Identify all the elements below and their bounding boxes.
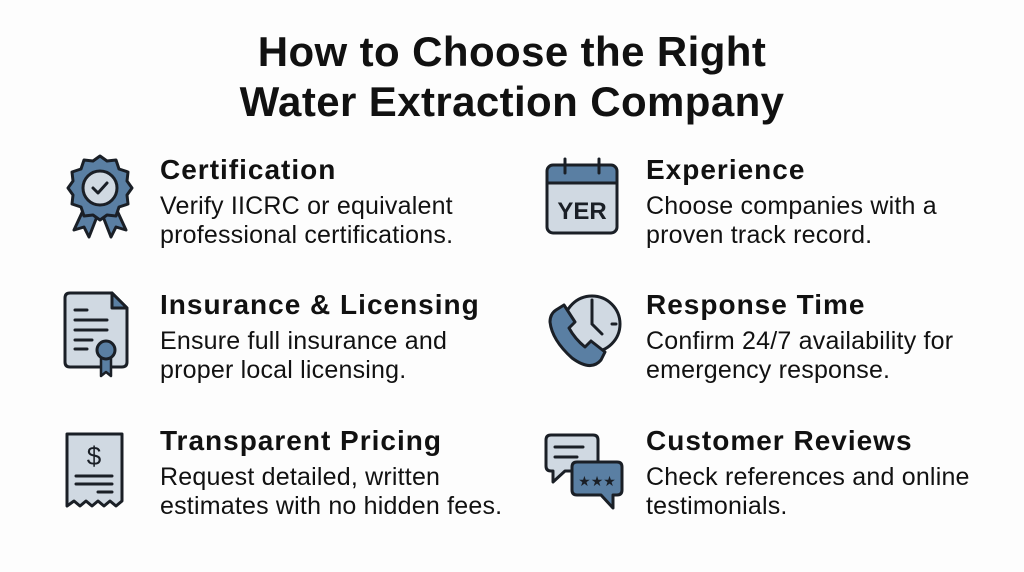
text: insurance — [160, 289, 480, 384]
text: insurance: Ensure full insurance and — [160, 327, 447, 355]
text: pricing: Request detailed, written — [160, 463, 440, 491]
icon: chat reviews — [544, 434, 624, 510]
icon: certification ribbon — [66, 154, 134, 239]
text: certification — [160, 154, 453, 249]
icon: calendar YER — [546, 158, 618, 234]
title: Water Extraction Company — [240, 78, 784, 125]
icon: calendar YER: YER — [557, 198, 607, 225]
title — [240, 28, 784, 125]
text: reviews: testimonials. — [646, 492, 788, 520]
icon: certificate document — [64, 291, 128, 378]
text: experience: Choose companies with a — [646, 192, 937, 220]
text: pricing — [160, 425, 502, 520]
text: reviews: Customer Reviews — [646, 425, 913, 456]
text: experience — [646, 154, 937, 249]
text: response time: Confirm 24/7 availability for — [646, 327, 953, 355]
icon: receipt: $ — [87, 441, 102, 471]
text: response time: Response Time — [646, 289, 865, 320]
text: experience: Experience — [646, 154, 805, 185]
text: reviews: Check references and online — [646, 463, 970, 491]
text: pricing: estimates with no hidden fees. — [160, 492, 502, 520]
text: response time — [646, 289, 953, 384]
icon: chat reviews: ★★★ — [578, 474, 616, 490]
icon: phone clock — [548, 294, 622, 368]
text: insurance: Insurance & Licensing — [160, 289, 480, 320]
text: certification: Verify IICRC or equivalent — [160, 192, 453, 220]
text: response time: emergency response. — [646, 356, 890, 384]
text: reviews — [646, 425, 970, 520]
icon: receipt — [66, 432, 124, 508]
text: experience: proven track record. — [646, 221, 872, 249]
text: certification: professional certifications. — [160, 221, 453, 249]
title: How to Choose the Right — [258, 28, 766, 75]
text: insurance: proper local licensing. — [160, 356, 406, 384]
text: pricing: Transparent Pricing — [160, 425, 442, 456]
text: certification: Certification — [160, 154, 336, 185]
